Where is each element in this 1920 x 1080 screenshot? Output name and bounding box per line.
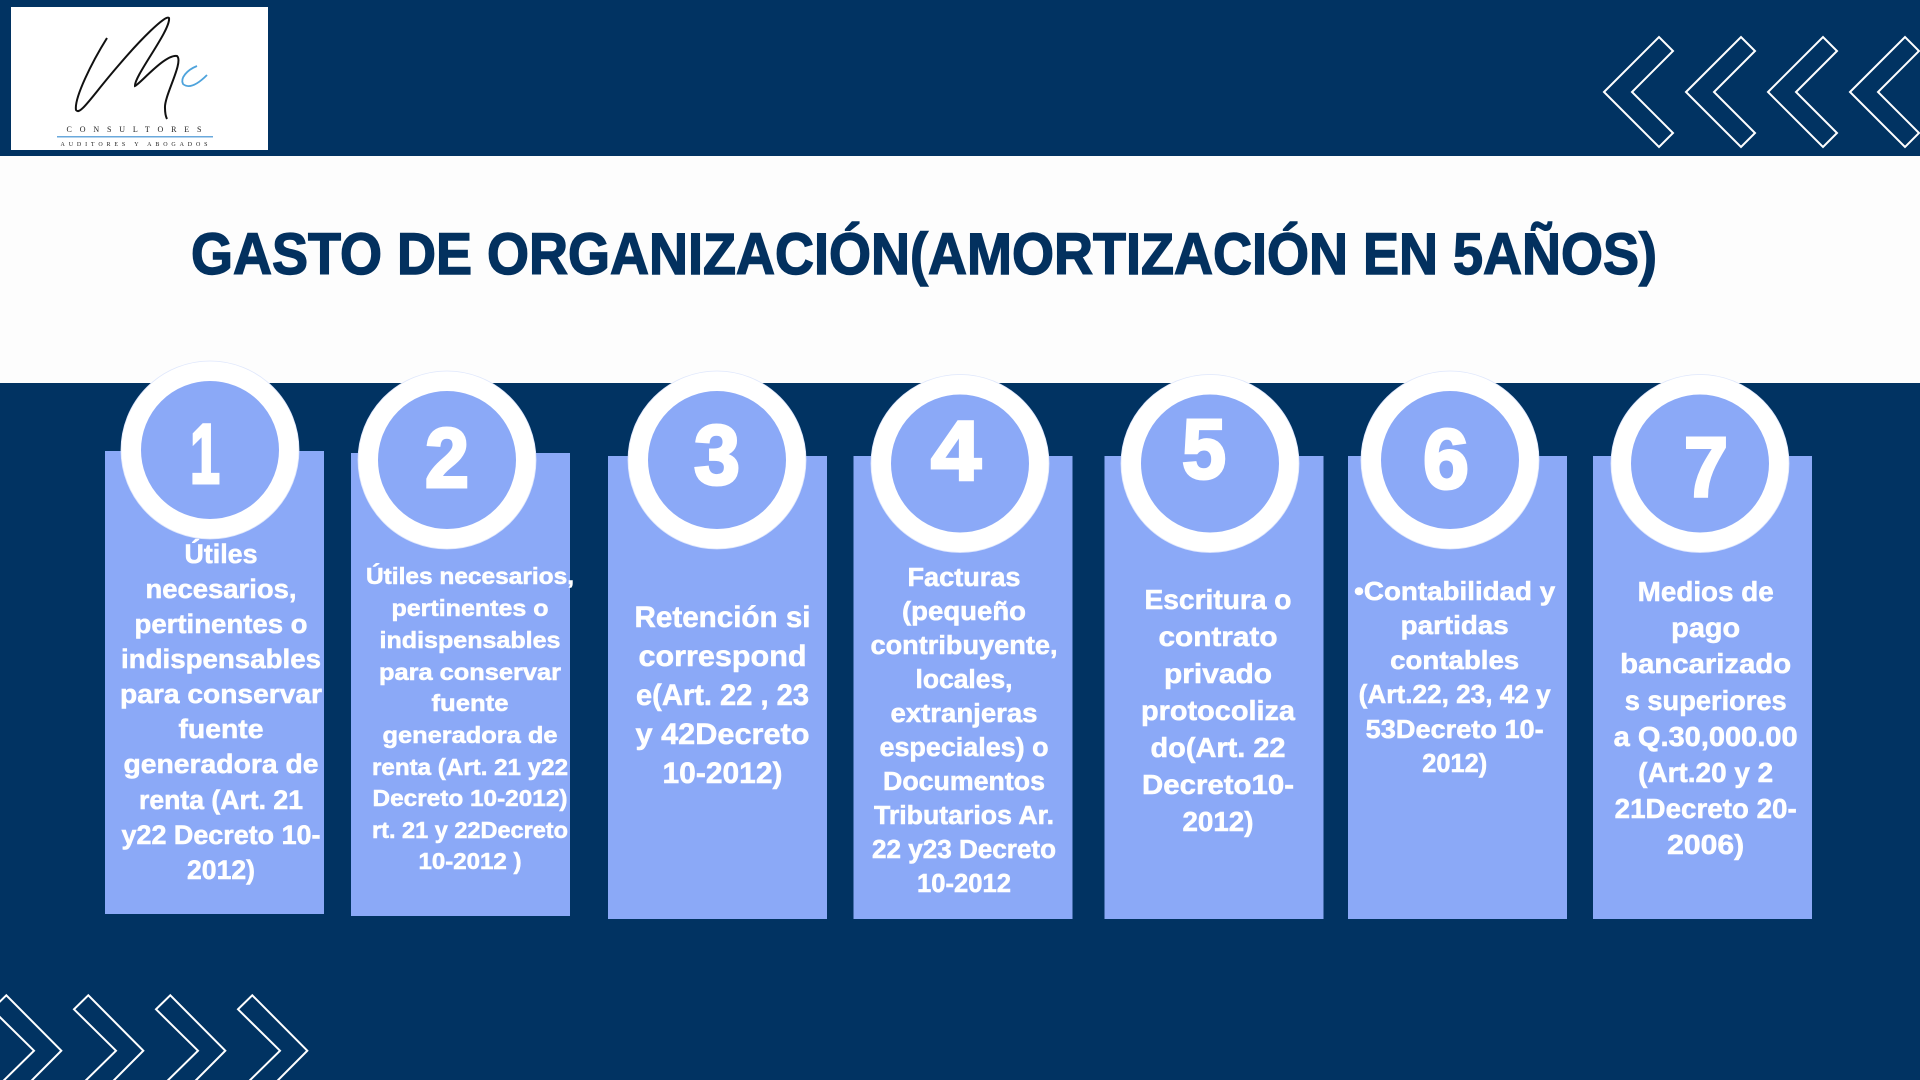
panel: step 4 xyxy=(854,374,1072,919)
text: step 7: a Q.30,000.00 xyxy=(1614,721,1798,752)
text: step 2: pertinentes o xyxy=(392,595,548,621)
text: step 6 xyxy=(1354,576,1556,778)
text: step 3: y 42Decreto xyxy=(636,718,810,751)
panel: step 2 xyxy=(351,371,574,916)
text: step 5: contrato xyxy=(1158,621,1278,652)
text: step 4: Tributarios Ar. xyxy=(874,802,1054,830)
panel: step 7: 7 xyxy=(1684,420,1728,514)
text: step 4: especiales) o xyxy=(880,734,1048,762)
text: step 1: 2012) xyxy=(187,855,255,885)
text: step 6: •Contabilidad y xyxy=(1354,576,1556,606)
icon: top-right chevrons xyxy=(1604,37,1919,147)
text: step 7: Medios de xyxy=(1638,576,1774,607)
panel: step 4: 4 xyxy=(931,404,981,498)
text: step 6: 53Decreto 10- xyxy=(1366,714,1544,744)
text: step 1: generadora de xyxy=(124,749,318,779)
text: step 3 xyxy=(634,601,810,790)
text: step 4: 22 y23 Decreto xyxy=(872,836,1056,864)
logo: AUDITORES Y ABOGADOS xyxy=(60,142,208,148)
text: step 6: partidas xyxy=(1401,610,1509,640)
text: step 5: Escritura o xyxy=(1144,584,1292,615)
text: step 1: necesarios, xyxy=(146,574,296,604)
text: step 2: Decreto 10-2012) xyxy=(372,785,568,811)
panel: step 3 xyxy=(608,371,827,919)
text: step 1 xyxy=(120,538,323,885)
text: step 4: 10-2012 xyxy=(917,870,1011,898)
text: step 3: correspond xyxy=(638,640,806,673)
text: step 4: (pequeño xyxy=(902,598,1026,626)
panel: step 1: 1 xyxy=(190,407,220,501)
text: step 3: 10-2012) xyxy=(662,757,782,790)
text: step 2: renta (Art. 21 y22 xyxy=(372,754,568,780)
text: step 5: 2012) xyxy=(1182,806,1254,837)
logo xyxy=(11,7,268,150)
panel: step 5 xyxy=(1104,374,1324,919)
text: step 7: 21Decreto 20- xyxy=(1615,793,1797,824)
text: step 2: indispensables xyxy=(380,627,560,653)
text: step 7: 2006) xyxy=(1667,829,1744,860)
text: step 7: pago xyxy=(1671,612,1740,643)
text: step 7: (Art.20 y 2 xyxy=(1638,757,1773,788)
panel: step 2: 2 xyxy=(425,411,469,505)
text: step 5: do(Art. 22 xyxy=(1150,732,1286,763)
text: step 3: e(Art. 22 , 23 xyxy=(636,679,809,712)
text: step 3: Retención si xyxy=(634,601,810,634)
text: step 2: Útiles necesarios, xyxy=(366,562,574,589)
panel: step 5: 5 xyxy=(1182,402,1226,496)
text: step 1: pertinentes o xyxy=(134,609,308,639)
text: step 7 xyxy=(1614,576,1798,860)
text: step 7: s superiores xyxy=(1625,685,1787,716)
text: step 2: fuente xyxy=(432,690,508,716)
logo: CONSULTORES xyxy=(66,125,202,134)
text: step 4 xyxy=(870,564,1058,898)
text: step 4: Documentos xyxy=(883,768,1045,796)
text: step 5: protocoliza xyxy=(1141,695,1295,726)
text: step 6: (Art.22, 23, 42 y xyxy=(1359,679,1551,709)
panel: step 6 xyxy=(1348,371,1567,919)
text: step 1: Útiles xyxy=(184,538,258,569)
text: step 2: generadora de xyxy=(382,722,558,748)
text: step 5 xyxy=(1141,584,1295,837)
text: step 2: para conservar xyxy=(379,659,561,685)
text: step 1: renta (Art. 21 xyxy=(139,785,303,815)
text: step 4: extranjeras xyxy=(890,700,1038,728)
text: step 1: fuente xyxy=(178,714,264,744)
text: step 2: 10-2012 ) xyxy=(418,848,522,874)
text: step 4: contribuyente, xyxy=(870,632,1058,660)
text: step 5: privado xyxy=(1164,658,1272,689)
text: step 6: contables xyxy=(1390,645,1519,675)
panel: step 3: 3 xyxy=(694,408,740,502)
panel: step 6: 6 xyxy=(1423,412,1469,506)
text: step 4: locales, xyxy=(916,666,1012,694)
text: step 1: indispensables xyxy=(121,644,321,674)
icon: bottom-left chevrons xyxy=(0,995,307,1080)
panel: step 1 xyxy=(105,361,324,914)
white title band xyxy=(0,156,1920,383)
title: GASTO DE ORGANIZACIÓN(AMORTIZACIÓN EN 5AÑOS) xyxy=(191,222,1657,287)
text: step 1: para conservar xyxy=(120,679,323,709)
text: step 7: bancarizado xyxy=(1620,648,1791,679)
text: step 2: rt. 21 y 22Decreto xyxy=(372,817,568,843)
text: step 1: y22 Decreto 10- xyxy=(122,820,320,850)
text: step 4: Facturas xyxy=(908,564,1020,592)
text: step 2 xyxy=(366,562,574,874)
text: step 5: Decreto10- xyxy=(1142,769,1294,800)
panel: step 7 xyxy=(1593,374,1812,919)
text: step 6: 2012) xyxy=(1422,748,1487,778)
